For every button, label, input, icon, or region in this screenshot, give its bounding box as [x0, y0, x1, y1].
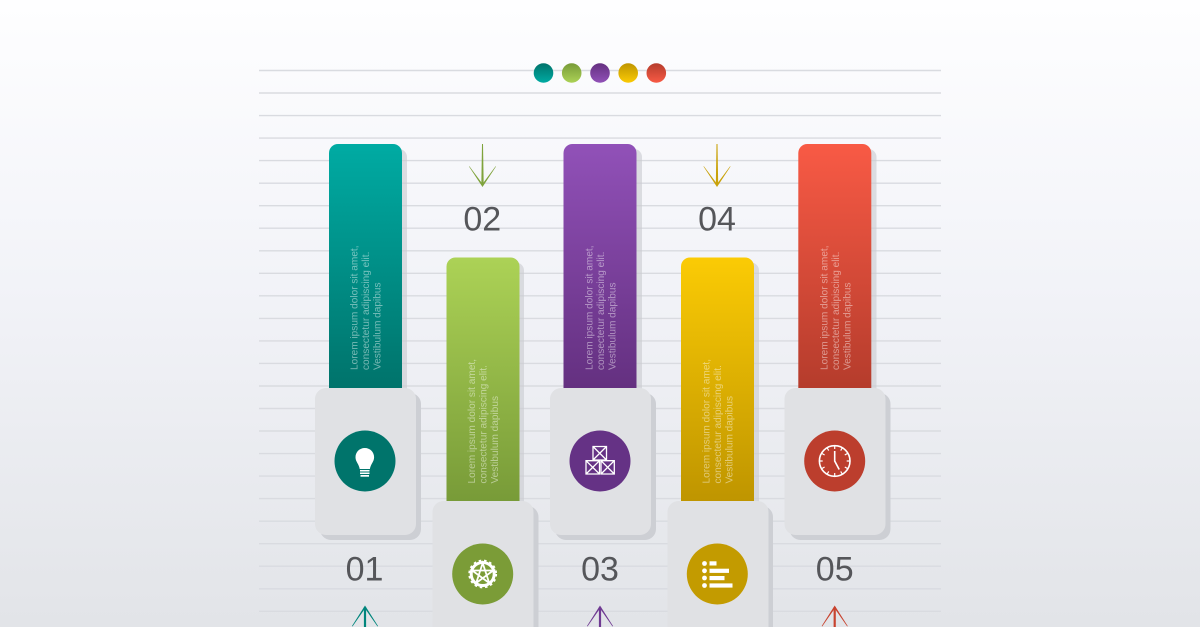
column 05 — [784, 144, 890, 627]
bar 02: Vestibulum dapibus — [490, 396, 501, 484]
column 03 — [550, 144, 656, 627]
bar 02: Lorem ipsum dolor sit amet, — [467, 359, 478, 484]
number 03: 03 — [581, 550, 619, 588]
bar 01 — [329, 144, 407, 397]
number 01: 01 — [346, 550, 383, 588]
card 03 — [550, 388, 656, 540]
bar 03: Vestibulum dapibus — [608, 282, 618, 370]
bar 04: Vestibulum dapibus — [724, 396, 736, 484]
bar 02: consectetur adipiscing elit. — [478, 365, 490, 484]
bar 04: Lorem ipsum dolor sit amet, — [702, 359, 712, 484]
card 02 — [432, 501, 538, 627]
bar 03 — [564, 144, 642, 397]
card 04 — [668, 501, 773, 627]
bar 01: Lorem ipsum dolor sit amet, — [350, 245, 360, 370]
bar 03: Lorem ipsum dolor sit amet, — [584, 245, 596, 370]
number 05: 05 — [816, 550, 854, 588]
arrow up 01 — [352, 606, 378, 627]
icon: stacked crates — [586, 446, 614, 474]
number 04: 04 — [698, 200, 736, 238]
bar 05 — [798, 144, 876, 397]
column 02 — [432, 144, 538, 627]
column 01 — [315, 144, 421, 627]
bar 05: consectetur adipiscing elit. — [831, 252, 842, 370]
bar 04 — [681, 258, 759, 510]
card 01 — [315, 388, 421, 540]
arrow up 03 — [587, 606, 613, 627]
icon: list bars — [702, 561, 732, 588]
bar 01: consectetur adipiscing elit. — [361, 252, 372, 370]
bar 03: consectetur adipiscing elit. — [596, 252, 607, 370]
colour dots legend — [534, 63, 666, 83]
bar 05: Lorem ipsum dolor sit amet, — [820, 245, 830, 370]
icon: gear wheel — [469, 561, 496, 587]
bar 02 — [446, 258, 524, 510]
arrow down 04 — [704, 144, 730, 187]
icon: clock — [819, 446, 850, 476]
bar 05: Vestibulum dapibus — [842, 282, 854, 370]
column 04 — [668, 144, 773, 627]
arrow up 05 — [822, 606, 848, 627]
number 02: 02 — [463, 200, 501, 238]
bar 04: consectetur adipiscing elit. — [713, 365, 724, 484]
arrow down 02 — [469, 144, 496, 187]
icon: light bulb — [356, 448, 374, 477]
card 05 — [784, 388, 890, 540]
bar 01: Vestibulum dapibus — [372, 282, 384, 370]
